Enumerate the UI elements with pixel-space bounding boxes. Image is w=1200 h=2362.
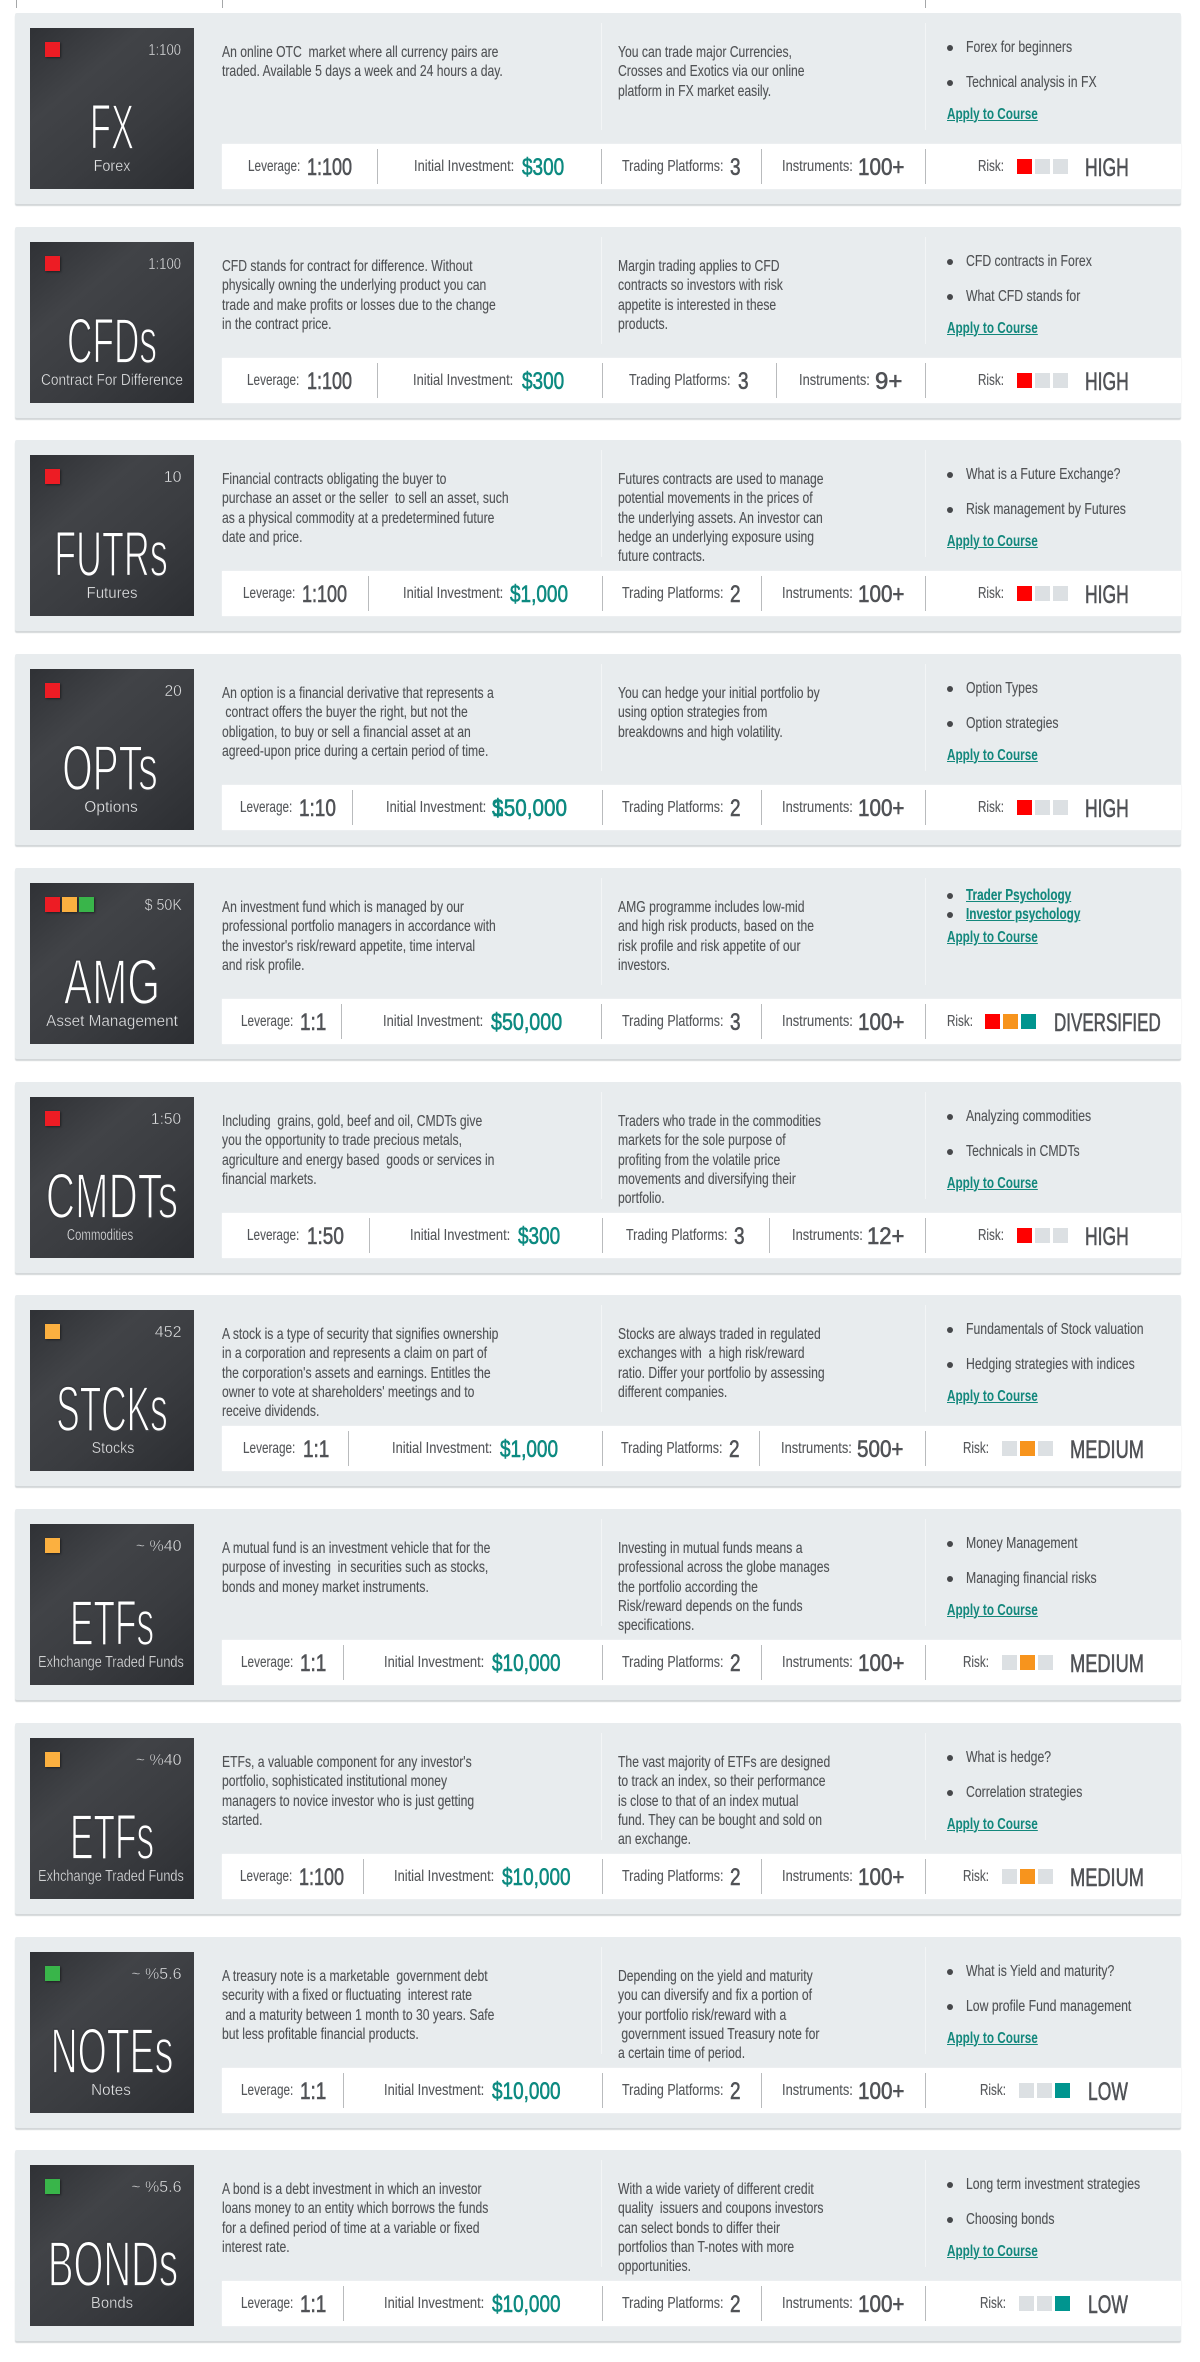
- course list: Apply to Course: [947, 532, 1038, 550]
- course list: What is hedge?: [966, 1749, 1051, 1766]
- course list: Apply to Course: [947, 1388, 1038, 1404]
- instruments: Instruments:: [792, 1227, 863, 1244]
- description: A mutual fund is an investment vehicle that for the purpose of investing in securities such as stocks, bonds and money market instruments.: [222, 1540, 490, 1596]
- course list: Hedging strategies with indices: [966, 1356, 1135, 1373]
- risk: MEDIUM: [1070, 1864, 1144, 1892]
- course list: Long term investment strategies: [966, 2176, 1140, 2193]
- course list: Apply to Course: [947, 106, 1038, 122]
- risk: Risk:: [978, 585, 1004, 602]
- trading platforms: 3: [730, 1009, 741, 1036]
- leverage: [247, 368, 352, 395]
- details: Stocks are always traded in regulated exchanges with a high risk/reward ratio. Differ your portfolio by assessing different companies.: [618, 1326, 825, 1401]
- product tile: NOTEs: ~ %5.6: [131, 1966, 182, 1983]
- course list: Investor psychology: [966, 906, 1080, 923]
- course list: Choosing bonds: [966, 2211, 1054, 2228]
- stats bar: [222, 785, 1181, 830]
- product tile: STCKs: 452: [155, 1324, 182, 1341]
- product tile: BONDs: ~ %5.6: [131, 2179, 182, 2196]
- risk: [978, 581, 1129, 609]
- course list: Apply to Course: [947, 2030, 1038, 2046]
- leverage: 1:100: [307, 368, 352, 395]
- initial investment: [392, 1436, 558, 1463]
- trading platforms: [621, 1436, 740, 1463]
- initial investment: Initial Investment:: [384, 2082, 484, 2099]
- panel: CMDTs: [15, 1082, 1181, 1273]
- trading platforms: 3: [738, 368, 749, 395]
- instruments: 500+: [857, 1436, 903, 1463]
- initial investment: Initial Investment:: [394, 1868, 494, 1885]
- trading platforms: [629, 368, 749, 395]
- details: You can hedge your initial portfolio by using option strategies from breakdowns and high volatility.: [618, 685, 820, 740]
- leverage: Leverage:: [240, 1868, 292, 1885]
- initial investment: Initial Investment:: [384, 2295, 484, 2312]
- initial investment: [384, 2281, 574, 2326]
- details: Investing in mutual funds means a professional across the globe manages the portfolio according the Risk/reward depends on the funds specifications.: [618, 1540, 830, 1634]
- product tile: FX: FX: [90, 91, 134, 163]
- course list: [947, 2175, 1177, 2265]
- stats bar: [222, 144, 1181, 189]
- instruments: [782, 581, 904, 608]
- risk: [963, 1854, 1158, 1899]
- course list: [947, 1534, 1177, 1624]
- course list: Apply to Course: [947, 1816, 1038, 1832]
- initial investment: [410, 1223, 560, 1250]
- panel: FUTRs: [15, 440, 1181, 631]
- leverage: Leverage:: [241, 2295, 293, 2312]
- trading platforms: 2: [730, 795, 741, 822]
- risk: Risk:: [978, 1227, 1004, 1244]
- trading platforms: Trading Platforms:: [622, 585, 723, 602]
- leverage: [243, 1436, 329, 1463]
- risk: DIVERSIFIED: [1054, 1009, 1161, 1037]
- description: An investment fund which is managed by our professional portfolio managers in accordance with the investor's risk/reward appetite, time interval and risk profile.: [222, 899, 496, 974]
- risk: HIGH: [1085, 154, 1129, 182]
- leverage: [241, 1640, 336, 1685]
- product tile: BONDs: [30, 2165, 194, 2326]
- product tile: STCKs: STCKs: [56, 1373, 168, 1445]
- product tile: CMDTs: Commodities: [67, 1227, 133, 1244]
- stats bar: [222, 1640, 1181, 1685]
- product tile: FUTRs: FUTRs: [54, 518, 168, 590]
- risk: [980, 2068, 1130, 2113]
- instruments: [782, 1009, 904, 1036]
- risk: Risk:: [963, 1868, 989, 1885]
- instruments: Instruments:: [782, 799, 853, 816]
- instruments: Instruments:: [782, 2295, 853, 2312]
- trading platforms: 3: [734, 1223, 745, 1250]
- trading platforms: 2: [730, 1650, 741, 1677]
- leverage: Leverage:: [241, 2082, 293, 2099]
- initial investment: Initial Investment:: [383, 1013, 483, 1030]
- product tile: NOTEs: NOTEs: [51, 2015, 173, 2087]
- trading platforms: [622, 2068, 742, 2113]
- initial investment: Initial Investment:: [392, 1440, 492, 1457]
- course list: [947, 253, 1092, 336]
- product tile: OPTs: Options: [84, 799, 138, 816]
- initial investment: $1,000: [510, 581, 568, 608]
- instruments: 100+: [858, 1864, 904, 1891]
- course list: Apply to Course: [947, 2242, 1038, 2260]
- product tile: FX: Forex: [94, 158, 130, 175]
- course list: Apply to Course: [947, 1602, 1038, 1618]
- product tile: NOTEs: [30, 1952, 194, 2113]
- description: A bond is a debt investment in which an investor loans money to an entity which borrows the funds for a defined period of time at a variable or fixed interest rate.: [222, 2181, 488, 2256]
- course list: [947, 39, 1097, 122]
- course list: [947, 887, 1080, 946]
- product tile: ETFs: ~ %40: [136, 1752, 182, 1769]
- risk: [978, 368, 1129, 396]
- risk: [978, 154, 1129, 182]
- risk: HIGH: [1085, 581, 1129, 609]
- panel: AMG: [15, 868, 1181, 1059]
- course list: CFD contracts in Forex: [966, 253, 1092, 270]
- description: Financial contracts obligating the buyer to purchase an asset or the seller to sell an asset, such as a physical commodity at a predetermined future date and price.: [222, 471, 509, 546]
- initial investment: $10,000: [492, 2078, 561, 2105]
- risk: HIGH: [1085, 795, 1129, 823]
- trading platforms: Trading Platforms:: [622, 2082, 723, 2099]
- initial investment: [384, 1640, 574, 1685]
- course list: What is a Future Exchange?: [966, 466, 1120, 483]
- initial investment: $10,000: [502, 1864, 571, 1891]
- initial investment: $150,000: [492, 795, 567, 822]
- trading platforms: 2: [729, 1436, 740, 1463]
- instruments: [782, 2068, 906, 2113]
- initial investment: Initial Investment:: [410, 1227, 510, 1244]
- panel: NOTEs: [15, 1937, 1181, 2128]
- course list: Managing financial risks: [966, 1570, 1097, 1587]
- course list: [947, 1321, 1144, 1404]
- leverage: 1:10: [299, 795, 336, 822]
- product tile: AMG: AMG: [64, 946, 160, 1018]
- course list: Apply to Course: [947, 929, 1038, 946]
- risk: Risk:: [947, 1013, 973, 1030]
- product tile: CMDTs: CMDTs: [46, 1160, 178, 1232]
- trading platforms: Trading Platforms:: [622, 2295, 723, 2312]
- details: The vast majority of ETFs are designed to track an index, so their performance is close to that of an index mutual fund. They can be bought and sold on an exchange.: [618, 1754, 830, 1848]
- leverage: [241, 2068, 336, 2113]
- risk: Risk:: [978, 372, 1004, 389]
- initial investment: $1,000: [500, 1436, 558, 1463]
- product tile: AMG: [30, 883, 194, 1044]
- instruments: Instruments:: [799, 372, 870, 389]
- panel: STCKs: [15, 1295, 1181, 1486]
- trading platforms: [622, 581, 741, 608]
- risk: HIGH: [1085, 1223, 1129, 1251]
- initial investment: Initial Investment:: [413, 372, 513, 389]
- description: An online OTC market where all currency pairs are traded. Available 5 days a week and 24 hours a day.: [222, 44, 503, 80]
- stats bar: [222, 358, 1181, 403]
- trading platforms: Trading Platforms:: [622, 1654, 723, 1671]
- instruments: [799, 368, 902, 395]
- instruments: [782, 1854, 906, 1899]
- risk: MEDIUM: [1070, 1436, 1144, 1464]
- stats bar: [222, 2281, 1181, 2326]
- instruments: [782, 795, 904, 822]
- description: A stock is a type of security that signifies ownership in a corporation and represents a claim on part of the corporation's assets and earnings. Entitles the owner to vote at shareholders' meetings and to receive dividends.: [222, 1326, 498, 1420]
- initial investment: $10,000: [492, 1650, 561, 1677]
- product tile: NOTEs: Notes: [91, 2082, 131, 2099]
- panel: ETFs: [15, 1723, 1181, 1914]
- initial investment: [413, 368, 564, 395]
- trading platforms: 2: [730, 2078, 741, 2105]
- product tile: CFDs: Contract For Difference: [41, 372, 183, 389]
- trading platforms: [622, 2281, 742, 2326]
- product tile: FUTRs: Futures: [87, 585, 137, 602]
- initial investment: $300: [522, 368, 564, 395]
- leverage: 1:100: [299, 1864, 344, 1891]
- instruments: Instruments:: [782, 1654, 853, 1671]
- initial investment: [383, 1009, 562, 1036]
- product tile: FUTRs: 10: [164, 469, 182, 486]
- course list: Apply to Course: [947, 320, 1038, 336]
- product tile: CMDTs: 1:50: [151, 1111, 182, 1128]
- initial investment: [394, 1854, 584, 1899]
- product tile: ETFs: ETFs: [70, 1587, 154, 1659]
- product tile: BONDs: Bonds: [91, 2295, 133, 2312]
- leverage: 1:1: [300, 2078, 326, 2105]
- instruments: 100+: [858, 154, 904, 181]
- leverage: Leverage:: [243, 585, 295, 602]
- product tile: CFDs: CFDs: [67, 305, 157, 377]
- course list: Apply to Course: [947, 1174, 1038, 1192]
- instruments: Instruments:: [782, 2082, 853, 2099]
- course list: Option Types: [966, 680, 1038, 697]
- details: You can trade major Currencies, Crosses and Exotics via our online platform in FX market easily.: [618, 44, 805, 100]
- leverage: [243, 581, 347, 608]
- leverage: [247, 1223, 344, 1250]
- trading platforms: [626, 1223, 745, 1250]
- details: AMG programme includes low-mid and high risk products, based on the risk profile and risk appetite of our investors.: [618, 899, 814, 974]
- trading platforms: Trading Platforms:: [621, 1440, 722, 1457]
- panel: OPTs: [15, 654, 1181, 845]
- product tile: OPTs: [30, 669, 194, 830]
- product tile: STCKs: Stocks: [92, 1440, 134, 1457]
- product tile: FX: [30, 28, 194, 189]
- stats bar: [222, 1854, 1181, 1899]
- trading platforms: 3: [730, 154, 741, 181]
- instruments: [782, 154, 904, 181]
- trading platforms: Trading Platforms:: [629, 372, 730, 389]
- course list: Low profile Fund management: [966, 1998, 1131, 2015]
- instruments: Instruments:: [782, 585, 853, 602]
- risk: Risk:: [978, 799, 1004, 816]
- risk: LOW: [1088, 2291, 1128, 2319]
- description: CFD stands for contract for difference. Without physically owning the underlying product you can trade and make profits or losses due to the change in the contract price.: [222, 258, 496, 333]
- course list: Technical analysis in FX: [966, 74, 1097, 91]
- leverage: Leverage:: [247, 1227, 299, 1244]
- instruments: Instruments:: [782, 158, 853, 175]
- instruments: [792, 1223, 904, 1250]
- initial investment: Initial Investment:: [384, 1654, 484, 1671]
- risk: Risk:: [963, 1654, 989, 1671]
- course list: Forex for beginners: [966, 39, 1072, 56]
- product tile: ETFs: ETFs: [70, 1801, 154, 1873]
- product tile: ETFs: Exhchange Traded Funds: [38, 1868, 184, 1885]
- product tile: STCKs: [30, 1310, 194, 1471]
- risk: [963, 1640, 1158, 1685]
- product tile: OPTs: OPTs: [62, 732, 158, 804]
- product tile: FUTRs: [30, 455, 194, 616]
- details: With a wide variety of different credit quality issuers and coupons investors can select bonds to differ their portfolios than T-notes with more opportunities.: [618, 2181, 823, 2275]
- initial investment: Initial Investment:: [403, 585, 503, 602]
- product tile: ETFs: [30, 1738, 194, 1899]
- panel: BONDs: [15, 2150, 1181, 2341]
- product tile: OPTs: 20: [164, 683, 182, 700]
- trading platforms: 2: [730, 2291, 741, 2318]
- initial investment: $300: [522, 154, 564, 181]
- trading platforms: Trading Platforms:: [622, 1013, 723, 1030]
- stats bar: [222, 999, 1181, 1044]
- course list: What CFD stands for: [966, 288, 1080, 305]
- leverage: 1:100: [307, 154, 352, 181]
- risk: Risk:: [963, 1440, 989, 1457]
- trading platforms: [622, 795, 741, 822]
- course list: [947, 1748, 1177, 1838]
- course list: Apply to Course: [947, 746, 1038, 764]
- product tile: FX: 1:100: [149, 42, 182, 59]
- leverage: 1:1: [303, 1436, 329, 1463]
- panel: CFDs: [15, 227, 1181, 418]
- instruments: Instruments:: [781, 1440, 852, 1457]
- course list: Risk management by Futures: [966, 501, 1126, 518]
- details: Depending on the yield and maturity you can diversify and fix a portion of your portfolio risk/reward with a government issued Treasury note for a certain time of period.: [618, 1968, 819, 2062]
- instruments: 100+: [858, 1650, 904, 1677]
- instruments: [782, 2281, 906, 2326]
- trading platforms: Trading Platforms:: [626, 1227, 727, 1244]
- risk: [978, 795, 1129, 823]
- initial investment: $300: [518, 1223, 560, 1250]
- instruments: Instruments:: [782, 1868, 853, 1885]
- initial investment: [386, 795, 567, 822]
- trading platforms: Trading Platforms:: [622, 158, 723, 175]
- course list: Money Management: [966, 1535, 1078, 1552]
- risk: [947, 1009, 1161, 1037]
- leverage: Leverage:: [241, 1013, 293, 1030]
- instruments: 100+: [858, 581, 904, 608]
- description: ETFs, a valuable component for any investor's portfolio, sophisticated institutional money managers to novice investor who is just getting started.: [222, 1754, 474, 1829]
- risk: Risk:: [978, 158, 1004, 175]
- product tile: AMG: Asset Management: [46, 1013, 178, 1030]
- instruments: [781, 1426, 905, 1471]
- course list: [947, 1108, 1091, 1192]
- leverage: 1:100: [302, 581, 347, 608]
- initial investment: [403, 581, 568, 608]
- risk: LOW: [1088, 2078, 1128, 2106]
- leverage: [240, 795, 336, 822]
- course list: Fundamentals of Stock valuation: [966, 1321, 1144, 1338]
- risk: [978, 1223, 1129, 1251]
- leverage: 1:1: [300, 2291, 326, 2318]
- instruments: 9+: [875, 368, 902, 395]
- course list: [947, 680, 1059, 764]
- panel: ETFs mutual funds: [15, 1509, 1181, 1700]
- leverage: Leverage:: [248, 158, 300, 175]
- leverage: Leverage:: [243, 1440, 295, 1457]
- leverage: 1:1: [300, 1009, 326, 1036]
- product tile: BONDs: BONDs: [48, 2228, 178, 2300]
- course list: Trader Psychology: [966, 887, 1071, 904]
- instruments: 100+: [858, 2078, 904, 2105]
- product tile: CMDTs: [30, 1097, 194, 1258]
- product tile: ETFs: ~ %40: [136, 1538, 182, 1555]
- risk: Risk:: [980, 2295, 1006, 2312]
- stats bar: [222, 1426, 1181, 1471]
- product tile: AMG: $ 50K: [144, 897, 182, 914]
- stats bar: [222, 1213, 1181, 1258]
- risk: MEDIUM: [1070, 1650, 1144, 1678]
- leverage: [248, 154, 352, 181]
- leverage: 1:1: [300, 1650, 326, 1677]
- course list: What is Yield and maturity?: [966, 1963, 1114, 1980]
- panel: FX: [15, 13, 1181, 204]
- trading platforms: Trading Platforms:: [622, 1868, 723, 1885]
- details: Margin trading applies to CFD contracts so investors with risk appetite is interested in these products.: [618, 258, 783, 333]
- initial investment: $10,000: [492, 2291, 561, 2318]
- product tile: ETFs: Exhchange Traded Funds: [38, 1654, 184, 1671]
- trading platforms: Trading Platforms:: [622, 799, 723, 816]
- instruments: 100+: [858, 2291, 904, 2318]
- trading platforms: 2: [730, 1864, 741, 1891]
- course list: [947, 466, 1126, 550]
- description: An option is a financial derivative that represents a contract offers the buyer the right, but not the obligation, to buy or sell a financial asset at an agreed-upon price during a certain period of time.: [222, 685, 494, 760]
- details: Futures contracts are used to manage potential movements in the prices of the underlying assets. An investor can hedge an underlying exposure using future contracts.: [618, 471, 823, 565]
- risk: [980, 2281, 1130, 2326]
- product tile: ETFs: [30, 1524, 194, 1685]
- course list: Correlation strategies: [966, 1784, 1082, 1801]
- course list: Technicals in CMDTs: [966, 1143, 1080, 1160]
- risk: [963, 1426, 1158, 1471]
- leverage: Leverage:: [241, 1654, 293, 1671]
- instruments: 12+: [867, 1223, 904, 1250]
- trading platforms: 2: [730, 581, 741, 608]
- risk: Risk:: [980, 2082, 1006, 2099]
- leverage: [241, 2281, 336, 2326]
- instruments: [782, 1640, 906, 1685]
- description: Including grains, gold, beef and oil, CMDTs give you the opportunity to trade precious metals, agriculture and energy based goods or services in financial markets.: [222, 1113, 494, 1188]
- course list: Analyzing commodities: [966, 1108, 1091, 1125]
- risk: HIGH: [1085, 368, 1129, 396]
- course list: [947, 1962, 1177, 2052]
- product tile: CFDs: [30, 242, 194, 403]
- stats bar: [222, 571, 1181, 616]
- instruments: 100+: [858, 1009, 904, 1036]
- trading platforms: [622, 1640, 742, 1685]
- course list: Option strategies: [966, 715, 1059, 732]
- stats bar: [222, 2068, 1181, 2113]
- initial investment: [414, 154, 564, 181]
- instruments: Instruments:: [782, 1013, 853, 1030]
- trading platforms: [622, 154, 741, 181]
- trading platforms: [622, 1009, 741, 1036]
- description: A treasury note is a marketable government debt security with a fixed or fluctuating interest rate and a maturity between 1 month to 30 years. Safe but less profitable financial products.: [222, 1968, 494, 2043]
- leverage: [241, 1009, 326, 1036]
- initial investment: Initial Investment:: [386, 799, 486, 816]
- initial investment: $50,000: [491, 1009, 562, 1036]
- leverage: 1:50: [307, 1223, 344, 1250]
- details: Traders who trade in the commodities markets for the sole purpose of profiting from the volatile price movements and diversifying their portfolio.: [618, 1113, 821, 1207]
- product tile: CFDs: 1:100: [149, 256, 182, 273]
- leverage: Leverage:: [247, 372, 299, 389]
- leverage: [240, 1854, 345, 1899]
- initial investment: Initial Investment:: [414, 158, 514, 175]
- leverage: Leverage:: [240, 799, 292, 816]
- initial investment: [384, 2068, 574, 2113]
- trading platforms: [622, 1854, 742, 1899]
- instruments: 100+: [858, 795, 904, 822]
